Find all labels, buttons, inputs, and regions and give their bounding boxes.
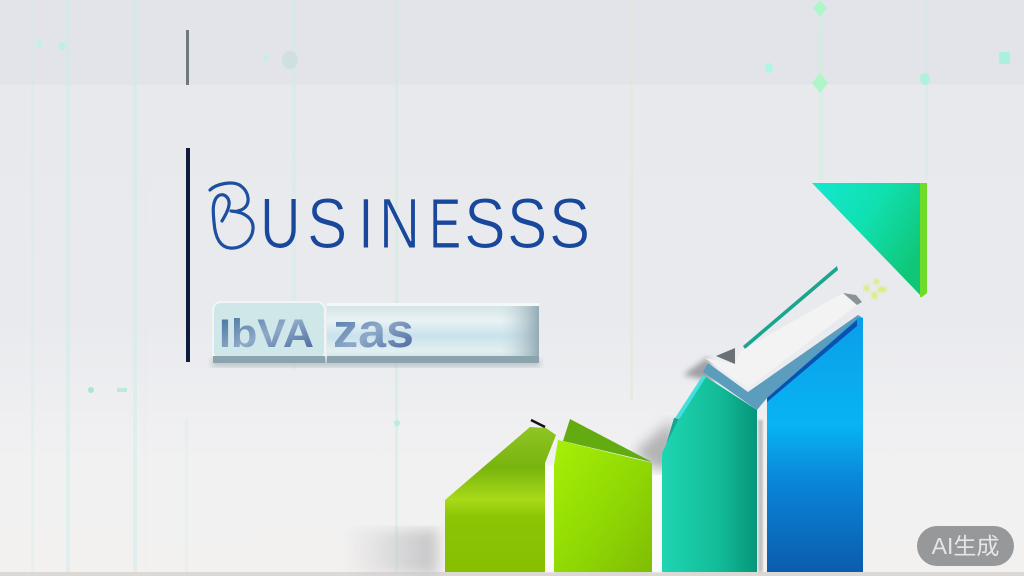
bar 1 bbox=[445, 427, 556, 572]
short vertical rule bbox=[186, 30, 189, 85]
AI generated badge: AI生成 bbox=[932, 533, 999, 559]
decorative dots and diamonds bbox=[36, 0, 1010, 426]
AI generated badge bbox=[917, 526, 1014, 566]
sparkle icon bbox=[864, 279, 886, 299]
title: U bbox=[260, 184, 301, 264]
plate: right segment bbox=[327, 303, 539, 363]
title: N bbox=[379, 184, 420, 263]
plate label right: zas bbox=[333, 304, 414, 357]
title bbox=[210, 183, 590, 264]
long vertical rule bbox=[186, 148, 190, 362]
title: E bbox=[429, 184, 461, 263]
growth arrow bbox=[743, 183, 927, 349]
plate: left segment bbox=[213, 302, 325, 360]
bar chart bbox=[445, 293, 863, 572]
bar halos bbox=[544, 465, 663, 572]
title: I bbox=[358, 184, 374, 263]
bar 3 bbox=[662, 375, 757, 572]
bar 4 bbox=[703, 315, 863, 572]
arrow head triangle bbox=[812, 183, 922, 297]
bar 2 bbox=[554, 419, 652, 572]
plate label left: IbVA bbox=[219, 312, 314, 356]
plate shadow bbox=[212, 358, 540, 367]
bar shadows bbox=[635, 420, 680, 470]
title: S bbox=[307, 183, 347, 263]
title: S bbox=[549, 185, 590, 264]
title: S bbox=[464, 184, 506, 264]
arrow shaft stripe bbox=[743, 266, 838, 349]
shadow at chart base bbox=[345, 530, 437, 574]
title: S bbox=[507, 183, 547, 263]
white chevron bbox=[705, 293, 857, 388]
subtitle plate bbox=[212, 302, 540, 367]
chevron notch bbox=[716, 348, 735, 364]
